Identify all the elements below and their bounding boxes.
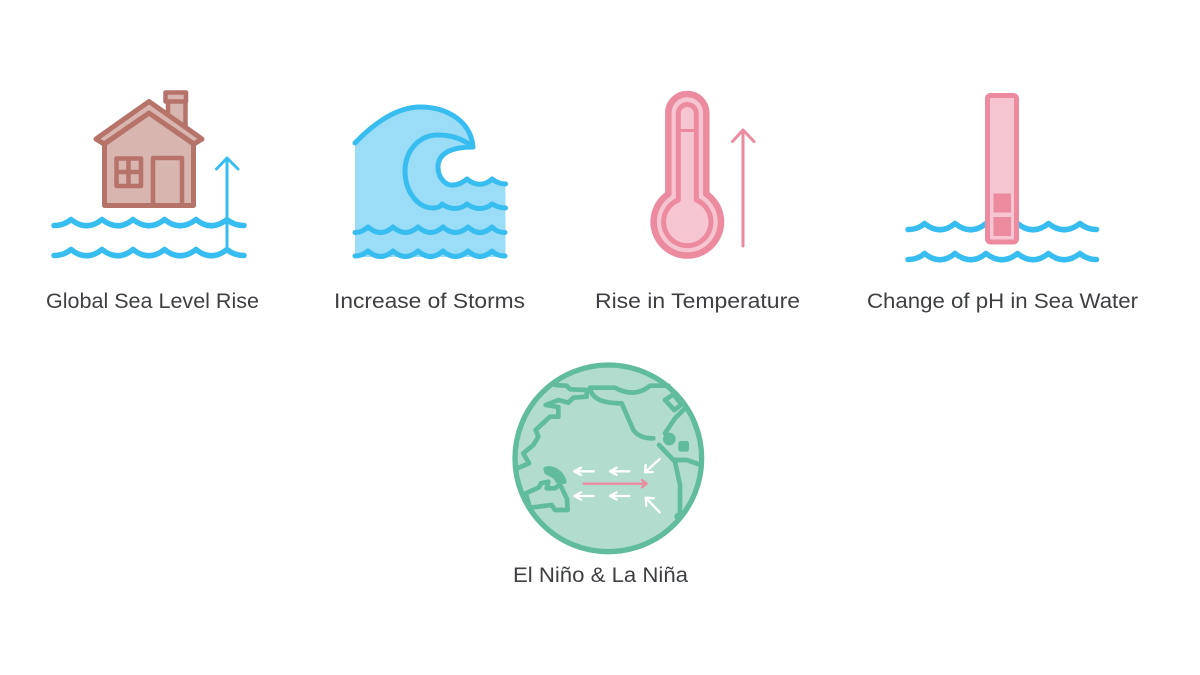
curl line (405, 135, 506, 208)
door (153, 158, 182, 205)
upward arrow (216, 158, 238, 248)
pH square lower (994, 217, 1011, 236)
icon: pH strip in water (908, 96, 1096, 260)
window (116, 158, 141, 186)
label: sea level: Global Sea Level Rise (46, 290, 259, 313)
icon: house above rising sea (54, 92, 244, 256)
icon: storm wave (355, 107, 506, 257)
label: El Nino: El Niño & La Niña (513, 564, 688, 587)
upward arrow (732, 130, 754, 246)
globe disc (515, 365, 702, 552)
pink current arrow (584, 480, 647, 487)
mercury line (678, 129, 696, 132)
label: pH: Change of pH in Sea Water (867, 290, 1138, 313)
roof (96, 102, 202, 144)
label: temperature: Rise in Temperature (595, 290, 800, 313)
white wind arrows (574, 459, 660, 512)
house body (104, 113, 194, 206)
thermometer outer (654, 94, 721, 256)
chimney (166, 92, 186, 129)
wave fill (355, 107, 506, 257)
pH strip (988, 96, 1016, 242)
thermometer inner tube and bulb (664, 105, 711, 246)
continents (516, 385, 701, 518)
pH square upper (994, 194, 1011, 212)
water waves (908, 224, 1096, 260)
water lines (355, 227, 505, 256)
icon: thermometer with arrow (654, 94, 754, 256)
wave outline (355, 107, 506, 185)
label: storms: Increase of Storms (334, 290, 525, 313)
water waves (54, 220, 244, 256)
icon: globe with currents (515, 365, 702, 552)
